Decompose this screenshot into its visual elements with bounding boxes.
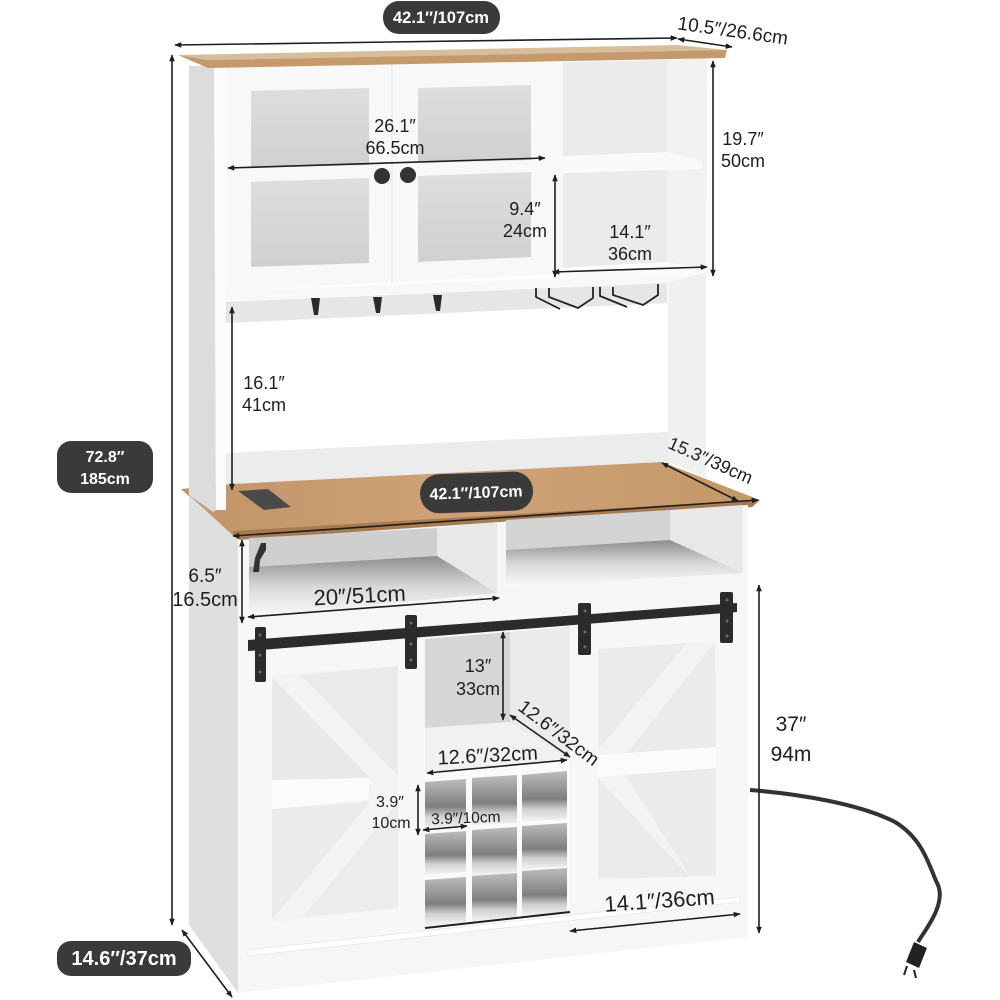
open shelves (553, 58, 711, 280)
label: cubby height (172, 566, 238, 611)
barn door rail (248, 592, 737, 682)
label: shelf width: 36cm (608, 244, 652, 264)
power cord (750, 790, 940, 978)
hook rail (226, 283, 667, 323)
furniture: upper hutch (226, 58, 711, 492)
label: cubby height: 6.5″ (188, 566, 222, 587)
label: lower shelf height: 24cm (503, 221, 547, 241)
label: lower height: 37″ (776, 713, 807, 736)
label: top width: 42.1″/107cm (393, 9, 489, 27)
label: wine cubby depth: 12.6″/32cm (514, 696, 603, 771)
power strip (238, 489, 291, 510)
wine cubby (425, 627, 570, 773)
label: wine cubby height (456, 656, 500, 699)
label: top width (383, 1, 500, 34)
label: opening height: 41cm (242, 395, 286, 415)
label: counter depth: 15.3″/39cm (665, 433, 756, 488)
dimension lines (172, 38, 759, 997)
label: base depth (57, 941, 191, 976)
left cubby (249, 522, 497, 617)
label: opening height (242, 373, 286, 415)
label: opening height: 16.1″ (243, 373, 285, 393)
label: counter width: 42.1″/107cm (429, 483, 523, 504)
label: top depth: 10.5″/26.6cm (676, 13, 789, 50)
label: overall height (57, 441, 153, 493)
hutch wood top (178, 45, 727, 68)
label: lower height (771, 713, 811, 766)
door knobs (374, 168, 390, 184)
label: wine cubby height: 33cm (456, 679, 500, 699)
label: bottle height: 10cm (371, 815, 411, 832)
label: lower shelf height (503, 199, 547, 241)
label: lower shelf height: 9.4″ (509, 199, 541, 219)
label: cubby height: 16.5cm (172, 589, 238, 611)
label: bottle width: 3.9″/10cm (431, 809, 501, 828)
cabinet doors (226, 62, 563, 291)
label: shelf height: 50cm (721, 151, 765, 171)
wine rack (425, 760, 570, 930)
label: shelf width: 14.1″ (609, 222, 651, 242)
right cubby (506, 505, 743, 587)
label: door width lower: 14.1″/36cm (603, 884, 715, 917)
label: lower height: 94m (771, 743, 811, 766)
furniture: posts on counter (178, 45, 727, 512)
label: wine cubby width: 12.6″/32cm (437, 742, 538, 770)
label: cubby width: 20″/51cm (313, 581, 406, 610)
right barn door (572, 614, 740, 913)
label: shelf width (608, 222, 652, 264)
left barn door (248, 639, 740, 956)
hutch back panel behind counter (226, 432, 668, 492)
hooks (311, 295, 442, 315)
label: overall height: 185cm (80, 471, 130, 488)
label: shelf height: 19.7″ (722, 129, 764, 149)
label: door width: 26.1″ (374, 116, 416, 136)
label: bottle height: 3.9″ (376, 794, 404, 811)
label: door width: 66.5cm (365, 138, 425, 158)
label: overall height: 72.8″ (86, 449, 125, 466)
label: base depth: 14.6″/37cm (71, 948, 177, 970)
label: shelf height (721, 129, 765, 171)
wine glass rack (536, 284, 658, 309)
label: bottle height (371, 794, 411, 832)
furniture: wood counter (181, 462, 760, 540)
label: counter width (419, 471, 534, 514)
label: door width (365, 116, 425, 158)
label: wine cubby height: 13″ (465, 656, 492, 676)
furniture: lower cabinet (189, 495, 748, 993)
